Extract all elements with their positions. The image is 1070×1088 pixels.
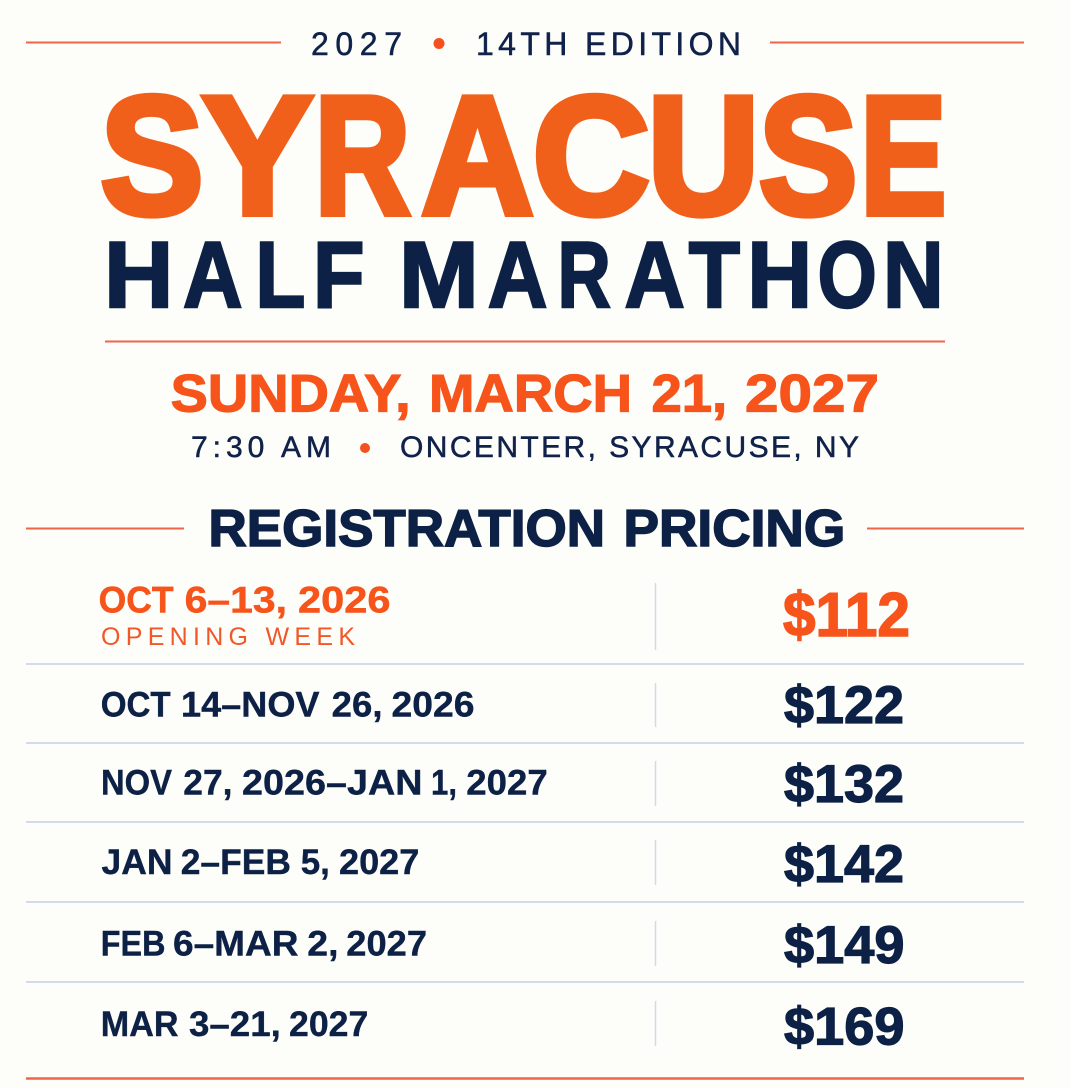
subtitle: Half Marathon: A	[624, 222, 685, 327]
row: Jan 2: JAN	[102, 842, 172, 882]
subtitle: Half Marathon: O	[818, 222, 877, 327]
title: Syracuse: Y	[202, 62, 313, 250]
subtitle: Half Marathon: L	[255, 222, 305, 327]
row: Nov 27: 1,	[431, 762, 457, 802]
time and location	[191, 431, 859, 464]
subtitle: Half Marathon: R	[558, 222, 611, 327]
row: Oct 14: 26,	[332, 685, 382, 725]
row: Mar 3: 2027	[289, 1004, 368, 1044]
subtitle: Half Marathon: H	[104, 222, 173, 327]
subtitle: Half Marathon: H	[747, 222, 812, 327]
row: Nov 27: 2026–JAN	[242, 762, 422, 802]
row: opening week	[99, 580, 910, 651]
row: Feb 6: 2027	[346, 923, 427, 963]
row: Nov 27	[101, 755, 904, 814]
row: Oct 14: 14–NOV	[181, 685, 320, 725]
title: Syracuse: U	[648, 62, 759, 250]
title: Syracuse: C	[533, 62, 650, 250]
subtitle: Half Marathon: N	[883, 222, 944, 327]
row: Jan 2: 5,	[301, 842, 330, 882]
title: Syracuse: A	[422, 62, 534, 250]
row: Mar 3: $169	[784, 998, 904, 1056]
edition line: 2027	[311, 26, 402, 62]
row: opening week: 2026	[298, 580, 390, 621]
title: Syracuse: E	[860, 62, 946, 250]
pricing table	[26, 580, 1024, 1056]
row: Oct 14: $122	[784, 676, 904, 735]
event date: SUNDAY,	[171, 365, 411, 424]
row: Feb 6: 2,	[307, 923, 338, 963]
time and location: ONCENTER, SYRACUSE, NY	[400, 431, 859, 464]
edition line: 14TH EDITION	[476, 26, 741, 62]
row: Jan 2: 2–FEB	[181, 842, 291, 882]
row: Mar 3: MAR	[101, 1004, 178, 1044]
edition line	[311, 26, 741, 62]
row: Feb 6: FEB	[101, 923, 166, 963]
row: Nov 27: NOV	[101, 762, 172, 802]
row: Feb 6	[101, 916, 905, 975]
event date: 21,	[652, 365, 727, 424]
event date: MARCH	[429, 365, 632, 424]
row: Jan 2: $142	[784, 835, 904, 894]
row: opening week: OPENING WEEK	[101, 623, 355, 651]
subtitle: Half Marathon: M	[399, 222, 479, 327]
row: Jan 2: 2027	[339, 842, 419, 882]
title: Syracuse: R	[315, 62, 410, 250]
subtitle: Half Marathon: A	[488, 222, 548, 327]
row: Nov 27: $132	[784, 755, 904, 814]
heading: registration pricing: REGISTRATION	[208, 500, 605, 558]
subtitle: Half Marathon: F	[313, 222, 364, 327]
event date: 2027	[745, 365, 879, 424]
row: Feb 6: 6–MAR	[173, 923, 298, 963]
row: Oct 14: OCT	[101, 685, 171, 725]
row: Oct 14	[101, 676, 904, 735]
heading: registration pricing: PRICING	[624, 500, 845, 558]
row: opening week: OCT	[99, 580, 174, 621]
row: Mar 3: 3–21,	[189, 1004, 281, 1044]
subtitle: Half Marathon: A	[183, 222, 242, 327]
title: Syracuse: S	[100, 62, 204, 250]
row: Nov 27: 27,	[183, 762, 232, 802]
row: opening week: $112	[783, 581, 910, 650]
title: Syracuse: S	[759, 62, 857, 250]
subtitle: Half Marathon: T	[689, 222, 740, 327]
row: Mar 3	[101, 998, 905, 1056]
row: opening week: 6–13,	[185, 580, 287, 621]
row: Feb 6: $149	[784, 916, 904, 975]
time and location: 7:30 AM	[191, 431, 331, 464]
row: Jan 2	[102, 835, 904, 894]
row: Nov 27: 2027	[466, 762, 548, 802]
row: Oct 14: 2026	[392, 685, 474, 725]
